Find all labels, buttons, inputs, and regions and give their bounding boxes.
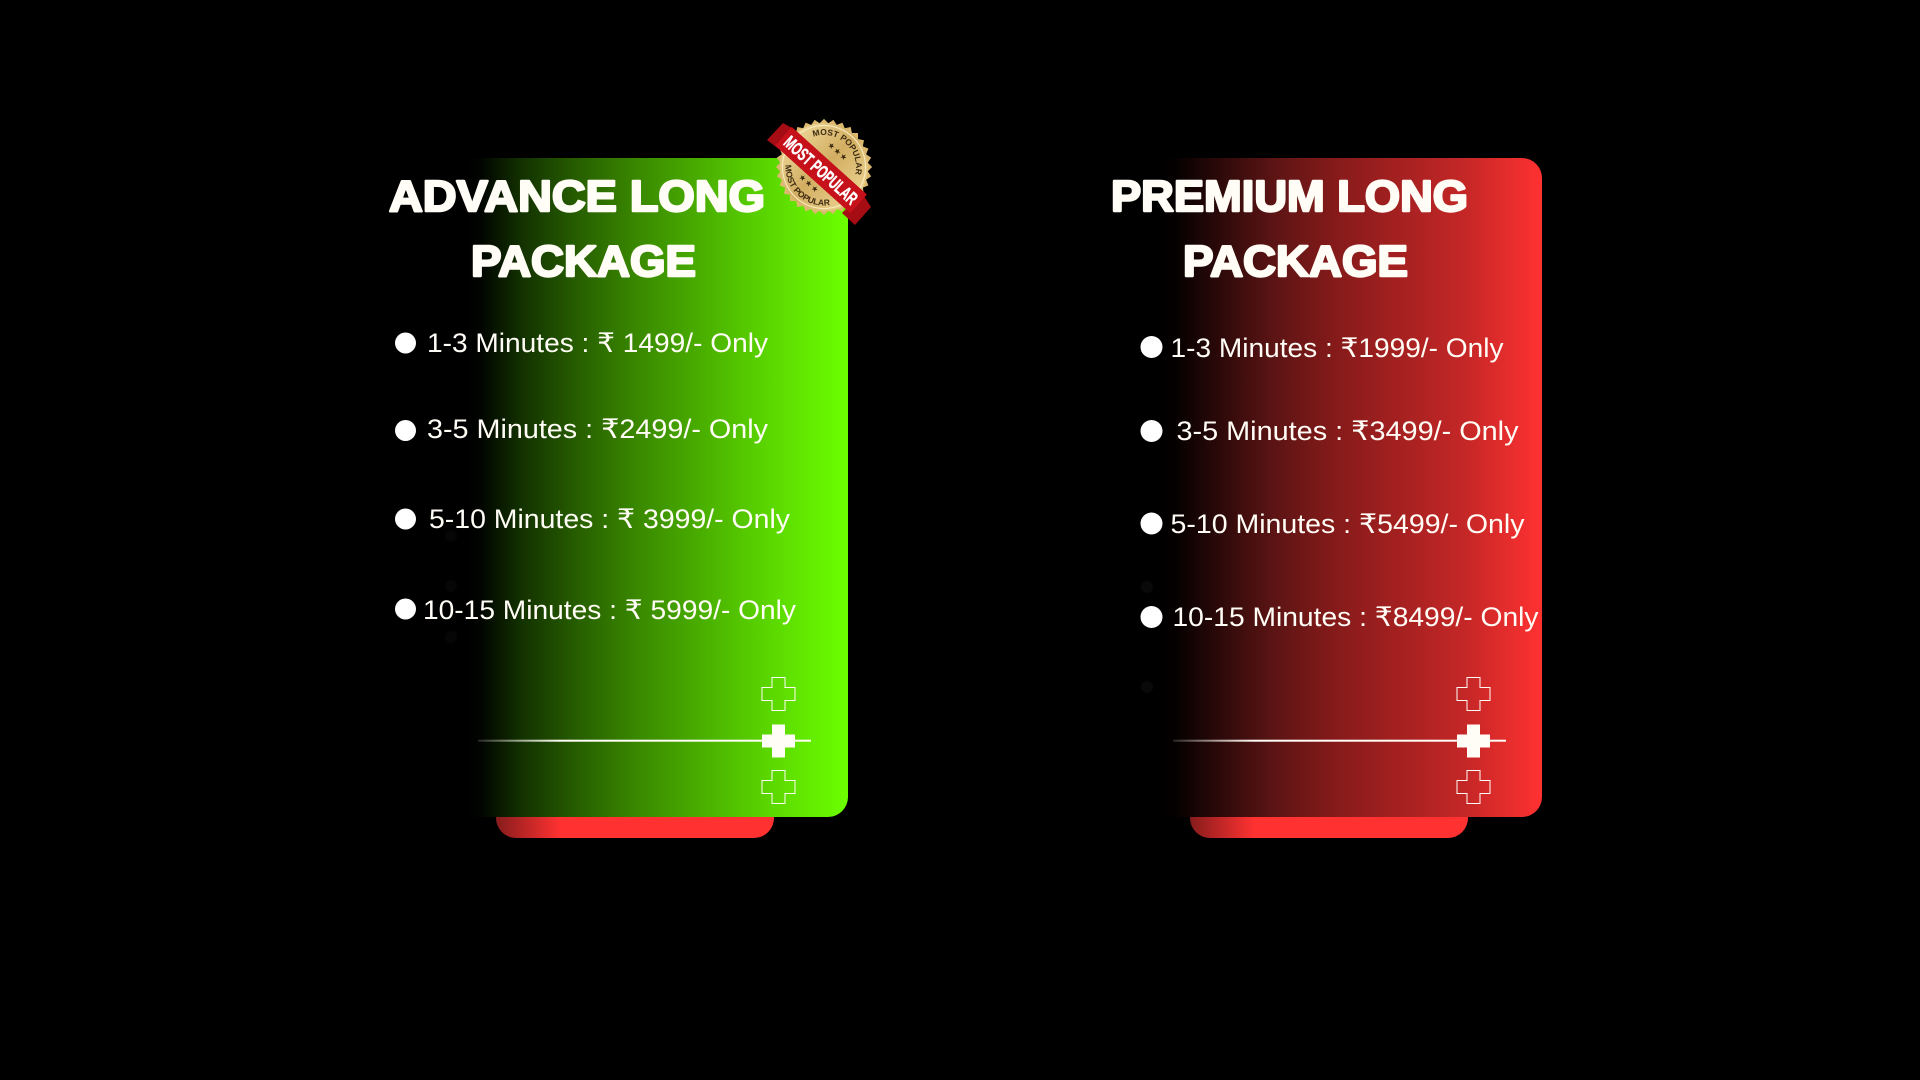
ribbon band — [775, 127, 867, 213]
heading: premium long package: PREMIUM LONG — [1111, 172, 1468, 221]
heading: premium long package — [1111, 172, 1468, 286]
stars: ★★★ — [826, 140, 850, 163]
gold seal — [776, 119, 872, 215]
ribbon text: MOST POPULAR — [780, 132, 862, 209]
faint dots — [445, 530, 457, 643]
panel: premium long package — [1111, 158, 1542, 838]
price list: advance — [395, 328, 797, 625]
heading: advance long package: PACKAGE — [471, 237, 696, 286]
price list: advance: 10-15 Minutes : ₹ 5999/- Only — [423, 595, 797, 625]
badge: most popular seal: MOST POPULAR — [785, 165, 830, 206]
red gradient card — [1122, 158, 1542, 817]
badge: most popular seal: ★★★ — [797, 172, 821, 195]
price list: premium: 10-15 Minutes : ₹8499/- Only — [1172, 602, 1539, 632]
seal ring text: MOST POPULAR — [812, 129, 862, 175]
price list: advance: 5-10 Minutes : ₹ 3999/- Only — [429, 504, 791, 534]
panel: advance long package — [389, 158, 848, 838]
divider with plus icons — [478, 678, 811, 804]
price list: premium: 5-10 Minutes : ₹5499/- Only — [1170, 509, 1525, 539]
price list: advance: 3-5 Minutes : ₹2499/- Only — [427, 414, 769, 444]
price list: premium — [1140, 333, 1539, 632]
badge: most popular seal — [767, 119, 872, 225]
heading: advance long package — [389, 172, 765, 286]
divider with plus icons — [1173, 678, 1506, 804]
price list: premium: 1-3 Minutes : ₹1999/- Only — [1170, 333, 1504, 363]
price list: advance: 1-3 Minutes : ₹ 1499/- Only — [427, 328, 769, 358]
heading: advance long package: ADVANCE LONG — [389, 172, 765, 221]
red tab behind red card — [1190, 800, 1468, 838]
price list: premium: 3-5 Minutes : ₹3499/- Only — [1176, 416, 1519, 446]
green gradient card — [428, 158, 848, 817]
ribbon tails — [767, 123, 871, 225]
heading: premium long package: PACKAGE — [1183, 237, 1408, 286]
red tab behind green card — [496, 800, 774, 838]
faint dots — [1141, 581, 1153, 693]
